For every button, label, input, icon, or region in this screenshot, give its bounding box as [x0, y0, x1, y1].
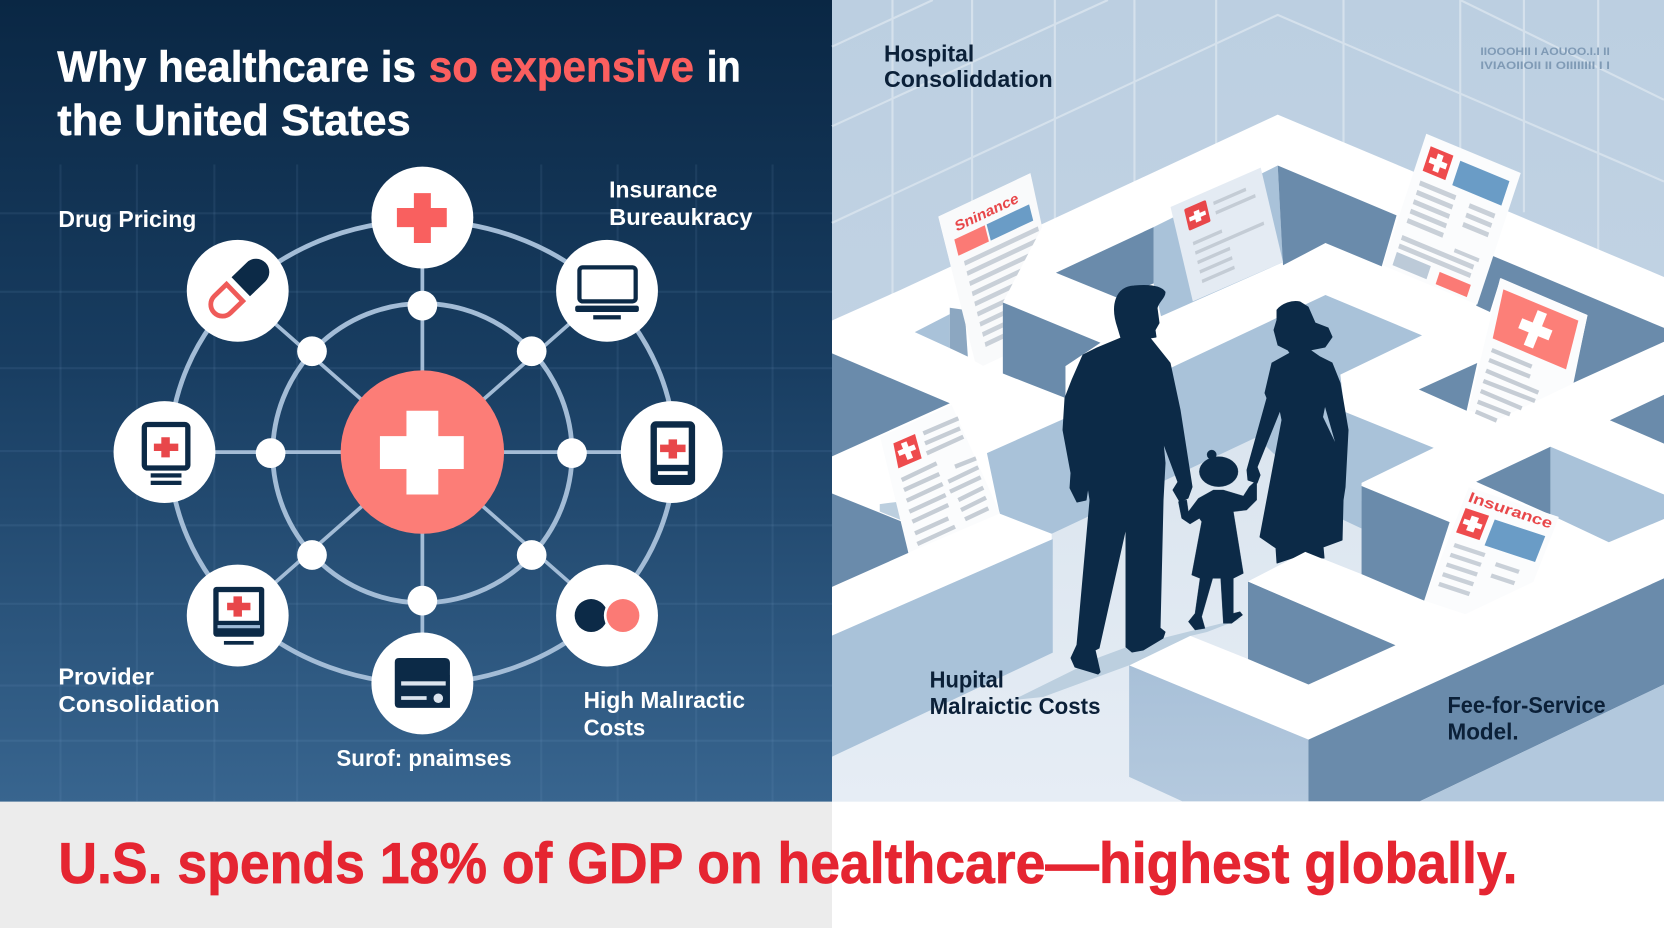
- icon: top red cross: [371, 167, 473, 268]
- document: insurance form: Insurance: [1466, 490, 1555, 532]
- icon: phone with cross: [621, 401, 723, 503]
- title: Why healthcare is: [57, 44, 416, 92]
- labels: network: Provider: [58, 663, 154, 689]
- title: [57, 44, 741, 145]
- family shadow on floor: [1013, 618, 1243, 700]
- silhouette: child: [1178, 450, 1257, 630]
- maze left wall: [1003, 302, 1100, 398]
- labels: maze: [884, 41, 1606, 745]
- maze top hole: [1056, 166, 1397, 316]
- document: sninance form: Sninance: [953, 190, 1020, 236]
- small caption top right: [1480, 46, 1610, 72]
- labels: network: Bureaukracy: [609, 204, 752, 230]
- icon: monitor with cross: [187, 565, 289, 666]
- title: in: [707, 44, 741, 92]
- icon: two overlapping circles: [556, 565, 658, 666]
- labels: network: Surof: pnaimses: [336, 745, 512, 771]
- labels: maze: Fee-for-Service: [1448, 692, 1606, 718]
- labels: network: Consolidation: [58, 691, 220, 717]
- maze lower walls: [832, 486, 1664, 801]
- document: sninance form: [938, 173, 1042, 347]
- network rings and spokes: [164, 218, 675, 683]
- maze right holes: [1419, 255, 1664, 542]
- maze corridor floor: [832, 437, 1362, 801]
- silhouette: man: [1063, 286, 1192, 674]
- silhouette: woman: [1247, 301, 1348, 563]
- document: top right form: [1383, 134, 1521, 305]
- icon: billing card: [371, 632, 473, 734]
- panel: maze illustration (right): [832, 0, 1664, 802]
- title: the United States: [57, 97, 411, 145]
- panel: bottom banner: [0, 802, 1664, 928]
- document: large red cross form: [1468, 278, 1587, 421]
- labels: network: High Malıractic: [584, 687, 745, 713]
- paper shadows on maze edge: [901, 223, 1535, 317]
- labels: network: [58, 176, 752, 771]
- labels: maze: Hupital: [930, 667, 1004, 693]
- document: centre form: [1171, 168, 1283, 301]
- labels: maze: Hospital: [884, 41, 974, 67]
- labels: network: Costs: [584, 714, 645, 740]
- icon: tablet with cross: [114, 401, 215, 503]
- document: lower left form: [880, 405, 1000, 553]
- labels: maze: Malraictic Costs: [930, 693, 1101, 719]
- document: insurance form: [1424, 492, 1559, 600]
- labels: maze: Consoliddation: [884, 66, 1053, 92]
- labels: network: Insurance: [609, 176, 717, 202]
- network junction nodes: [256, 291, 587, 616]
- banner statistic text: U.S. spends 18% of GDP on healthcare—highest globally.: [58, 832, 1518, 896]
- icon: central medical cross: [341, 370, 504, 534]
- labels: maze: Model.: [1448, 719, 1519, 745]
- gap between woman's arm and dress: [1323, 407, 1335, 442]
- panel: cost drivers network (left): [0, 0, 832, 802]
- labels: network: Drug Pricing: [58, 206, 196, 232]
- title: so expensive: [429, 44, 694, 92]
- small caption top right: IVIAOIIOII II OIIIIIIII I I: [1480, 60, 1610, 72]
- maze centre hole: [987, 295, 1434, 541]
- icon: pill: [187, 240, 289, 342]
- maze left holes: [832, 308, 968, 587]
- maze white walkways: [832, 115, 1664, 740]
- maze block in front of family: [1248, 552, 1371, 607]
- silhouette: family: [1063, 286, 1348, 674]
- icon: laptop: [556, 240, 658, 342]
- small caption top right: IIOOOHII I AOUOO.I.I II: [1480, 46, 1610, 58]
